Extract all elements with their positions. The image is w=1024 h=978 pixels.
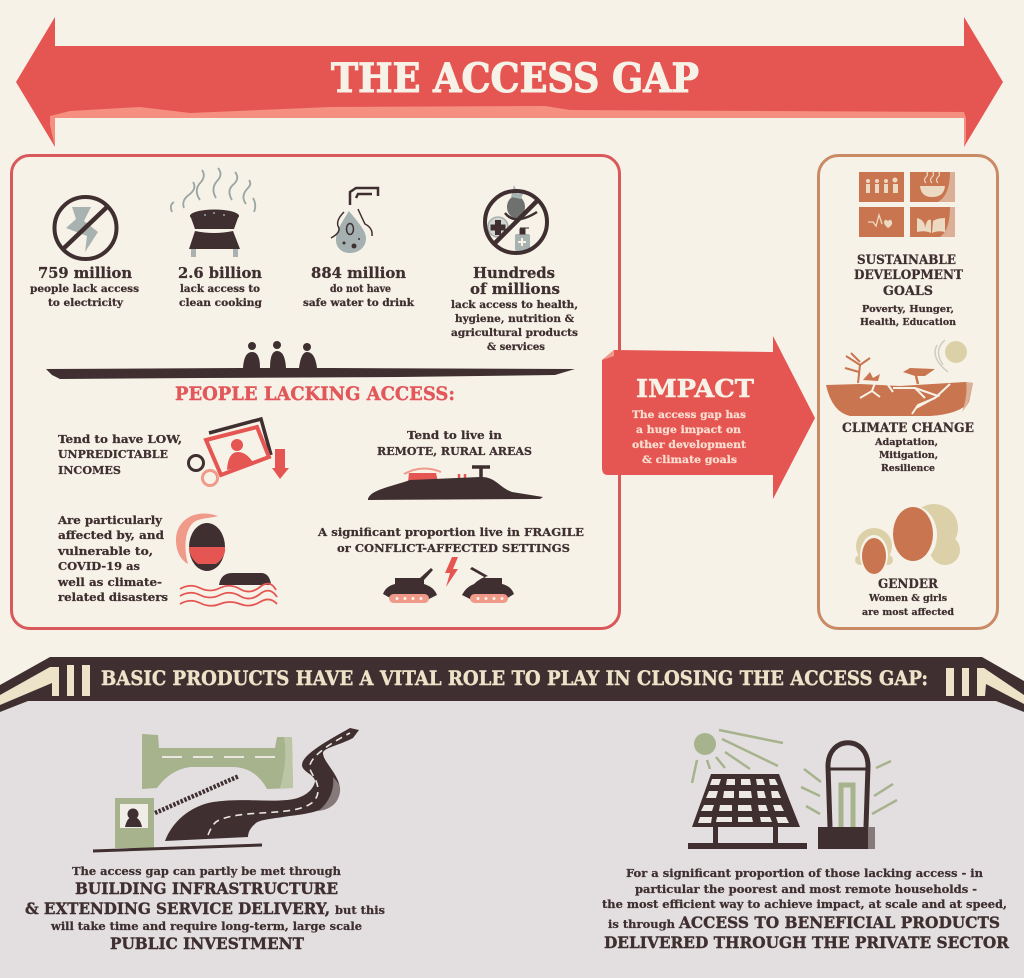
SDG heading: DEVELOPMENT bbox=[854, 268, 963, 283]
text: private sector products: is through bbox=[608, 917, 676, 931]
gender heading: GENDER bbox=[878, 577, 938, 592]
stat: health hygiene nutrition: lack access to health, bbox=[451, 299, 578, 311]
SDG list: Poverty, Hunger, bbox=[862, 304, 954, 315]
gender text bbox=[862, 593, 954, 618]
stat: electricity bbox=[30, 197, 139, 309]
gender text: Women & girls bbox=[868, 593, 947, 604]
icon: drought landscape bbox=[826, 340, 973, 416]
SDG list bbox=[860, 304, 956, 328]
stat: electricity: to electricity bbox=[48, 297, 124, 309]
stat: health hygiene nutrition: & services bbox=[487, 341, 545, 353]
impact text bbox=[632, 409, 746, 466]
block: remote rural areas: Tend to live in bbox=[407, 428, 503, 442]
block: low incomes: UNPREDICTABLE bbox=[58, 447, 168, 461]
block: remote rural areas: REMOTE, RURAL AREAS bbox=[377, 444, 532, 458]
panel: affected goals bbox=[818, 156, 998, 628]
block: covid and disasters: related disasters bbox=[58, 590, 168, 604]
text: infrastructure: but this bbox=[335, 903, 385, 917]
icon: people on ground line bbox=[46, 341, 575, 379]
text: private sector products: the most efficient way to achieve impact, at scale and at speed, bbox=[602, 897, 1007, 911]
block: fragile and conflict settings: or CONFLICT-AFFECTED SETTINGS bbox=[337, 541, 570, 555]
illustration: bridge, booth and road bbox=[93, 728, 359, 851]
block: covid and disasters: Are particularly bbox=[57, 513, 162, 527]
icon: flooded house bbox=[180, 573, 277, 606]
title arrow banner bbox=[16, 17, 1003, 147]
text: infrastructure: PUBLIC INVESTMENT bbox=[110, 934, 304, 953]
icon: SDG tiles bbox=[859, 171, 955, 237]
icon: woman and girl bbox=[855, 504, 960, 575]
heading: people lacking access: PEOPLE LACKING ACCESS: bbox=[175, 383, 455, 405]
text: infrastructure bbox=[25, 864, 385, 953]
block: low incomes: INCOMES bbox=[58, 463, 121, 477]
SDG heading: GOALS bbox=[883, 284, 933, 299]
impact text: & climate goals bbox=[642, 454, 737, 466]
text: private sector products: DELIVERED THROUGH THE PRIVATE SECTOR bbox=[604, 933, 1010, 952]
stat: health hygiene nutrition bbox=[451, 185, 578, 353]
icon: no electricity bbox=[54, 197, 116, 259]
text: infrastructure: BUILDING INFRASTRUCTURE bbox=[75, 879, 338, 898]
climate list: Adaptation, bbox=[874, 437, 938, 448]
stat: electricity: 759 million bbox=[38, 265, 132, 282]
SDG heading bbox=[854, 253, 963, 299]
block: low incomes bbox=[58, 419, 289, 486]
banner: basic products bbox=[0, 657, 1024, 712]
block: covid and disasters bbox=[57, 513, 277, 606]
block: fragile and conflict settings bbox=[317, 525, 584, 603]
text: infrastructure: The access gap can partly be met through bbox=[72, 864, 342, 878]
climate list: Mitigation, bbox=[879, 450, 938, 461]
text: private sector products: ACCESS TO BENEFICIAL PRODUCTS bbox=[678, 913, 1000, 932]
block: remote rural areas bbox=[368, 428, 543, 500]
panel: impact arrow bbox=[602, 336, 815, 499]
stat: safe water bbox=[303, 188, 415, 309]
text: infrastructure: will take time and require long-term, large scale bbox=[50, 919, 362, 933]
banner heading: BASIC PRODUCTS HAVE A VITAL ROLE TO PLAY IN CLOSING THE ACCESS GAP: bbox=[101, 666, 928, 690]
climate heading: CLIMATE CHANGE bbox=[842, 421, 974, 436]
stat: safe water: do not have bbox=[330, 283, 391, 295]
icon: dirty water drop bbox=[331, 188, 378, 253]
stat: clean cooking: 2.6 billion bbox=[178, 265, 262, 282]
panel: people lacking access bbox=[12, 156, 620, 628]
text: private sector products: particular the poorest and most remote households - bbox=[635, 882, 977, 896]
stat: clean cooking: clean cooking bbox=[179, 297, 263, 309]
text: infrastructure: & EXTENDING SERVICE DELIVERY, bbox=[25, 899, 330, 918]
SDG heading: SUSTAINABLE bbox=[857, 253, 956, 268]
icon: banknote, coins and down arrow bbox=[188, 419, 289, 486]
icon: cooking pot with steam bbox=[171, 168, 255, 257]
block: covid and disasters: affected by, and bbox=[58, 528, 164, 542]
illustration: solar panel and lantern bbox=[688, 730, 897, 849]
stat: health hygiene nutrition: Hundreds bbox=[473, 265, 555, 282]
lower section background bbox=[0, 701, 1024, 978]
stat: clean cooking: lack access to bbox=[180, 283, 260, 295]
icon: two tanks and lightning bolt bbox=[383, 557, 514, 603]
gender text: are most affected bbox=[862, 607, 954, 618]
stat: health hygiene nutrition: hygiene, nutrition & bbox=[455, 313, 575, 325]
impact text: The access gap has bbox=[632, 409, 746, 421]
icon: masked face bbox=[176, 513, 225, 571]
block: covid and disasters: well as climate- bbox=[57, 575, 162, 589]
climate list bbox=[874, 437, 938, 474]
icon: rural hill bbox=[368, 467, 543, 500]
icon: no health products bbox=[485, 185, 547, 253]
SDG list: Health, Education bbox=[860, 317, 956, 328]
block: covid and disasters: COVID-19 as bbox=[58, 559, 140, 573]
impact text: a huge impact on bbox=[636, 424, 741, 436]
stat: safe water: 884 million bbox=[311, 265, 406, 282]
block: covid and disasters: vulnerable to, bbox=[57, 544, 153, 558]
stat: health hygiene nutrition: of millions bbox=[470, 281, 560, 298]
stat: safe water: safe water to drink bbox=[303, 297, 415, 309]
stat: health hygiene nutrition: agricultural products bbox=[451, 327, 578, 339]
block: fragile and conflict settings: A significant proportion live in FRAGILE bbox=[317, 525, 584, 539]
block: low incomes: Tend to have LOW, bbox=[58, 432, 182, 446]
text: private sector products: For a significant proportion of those lacking access - in bbox=[626, 866, 984, 880]
text: private sector products bbox=[602, 866, 1010, 952]
impact text: other development bbox=[632, 439, 746, 451]
impact heading: IMPACT bbox=[636, 374, 754, 403]
climate list: Resilience bbox=[881, 463, 935, 474]
title: THE ACCESS GAP bbox=[331, 55, 699, 102]
stat: electricity: people lack access bbox=[30, 283, 139, 295]
stat: clean cooking bbox=[171, 168, 263, 309]
